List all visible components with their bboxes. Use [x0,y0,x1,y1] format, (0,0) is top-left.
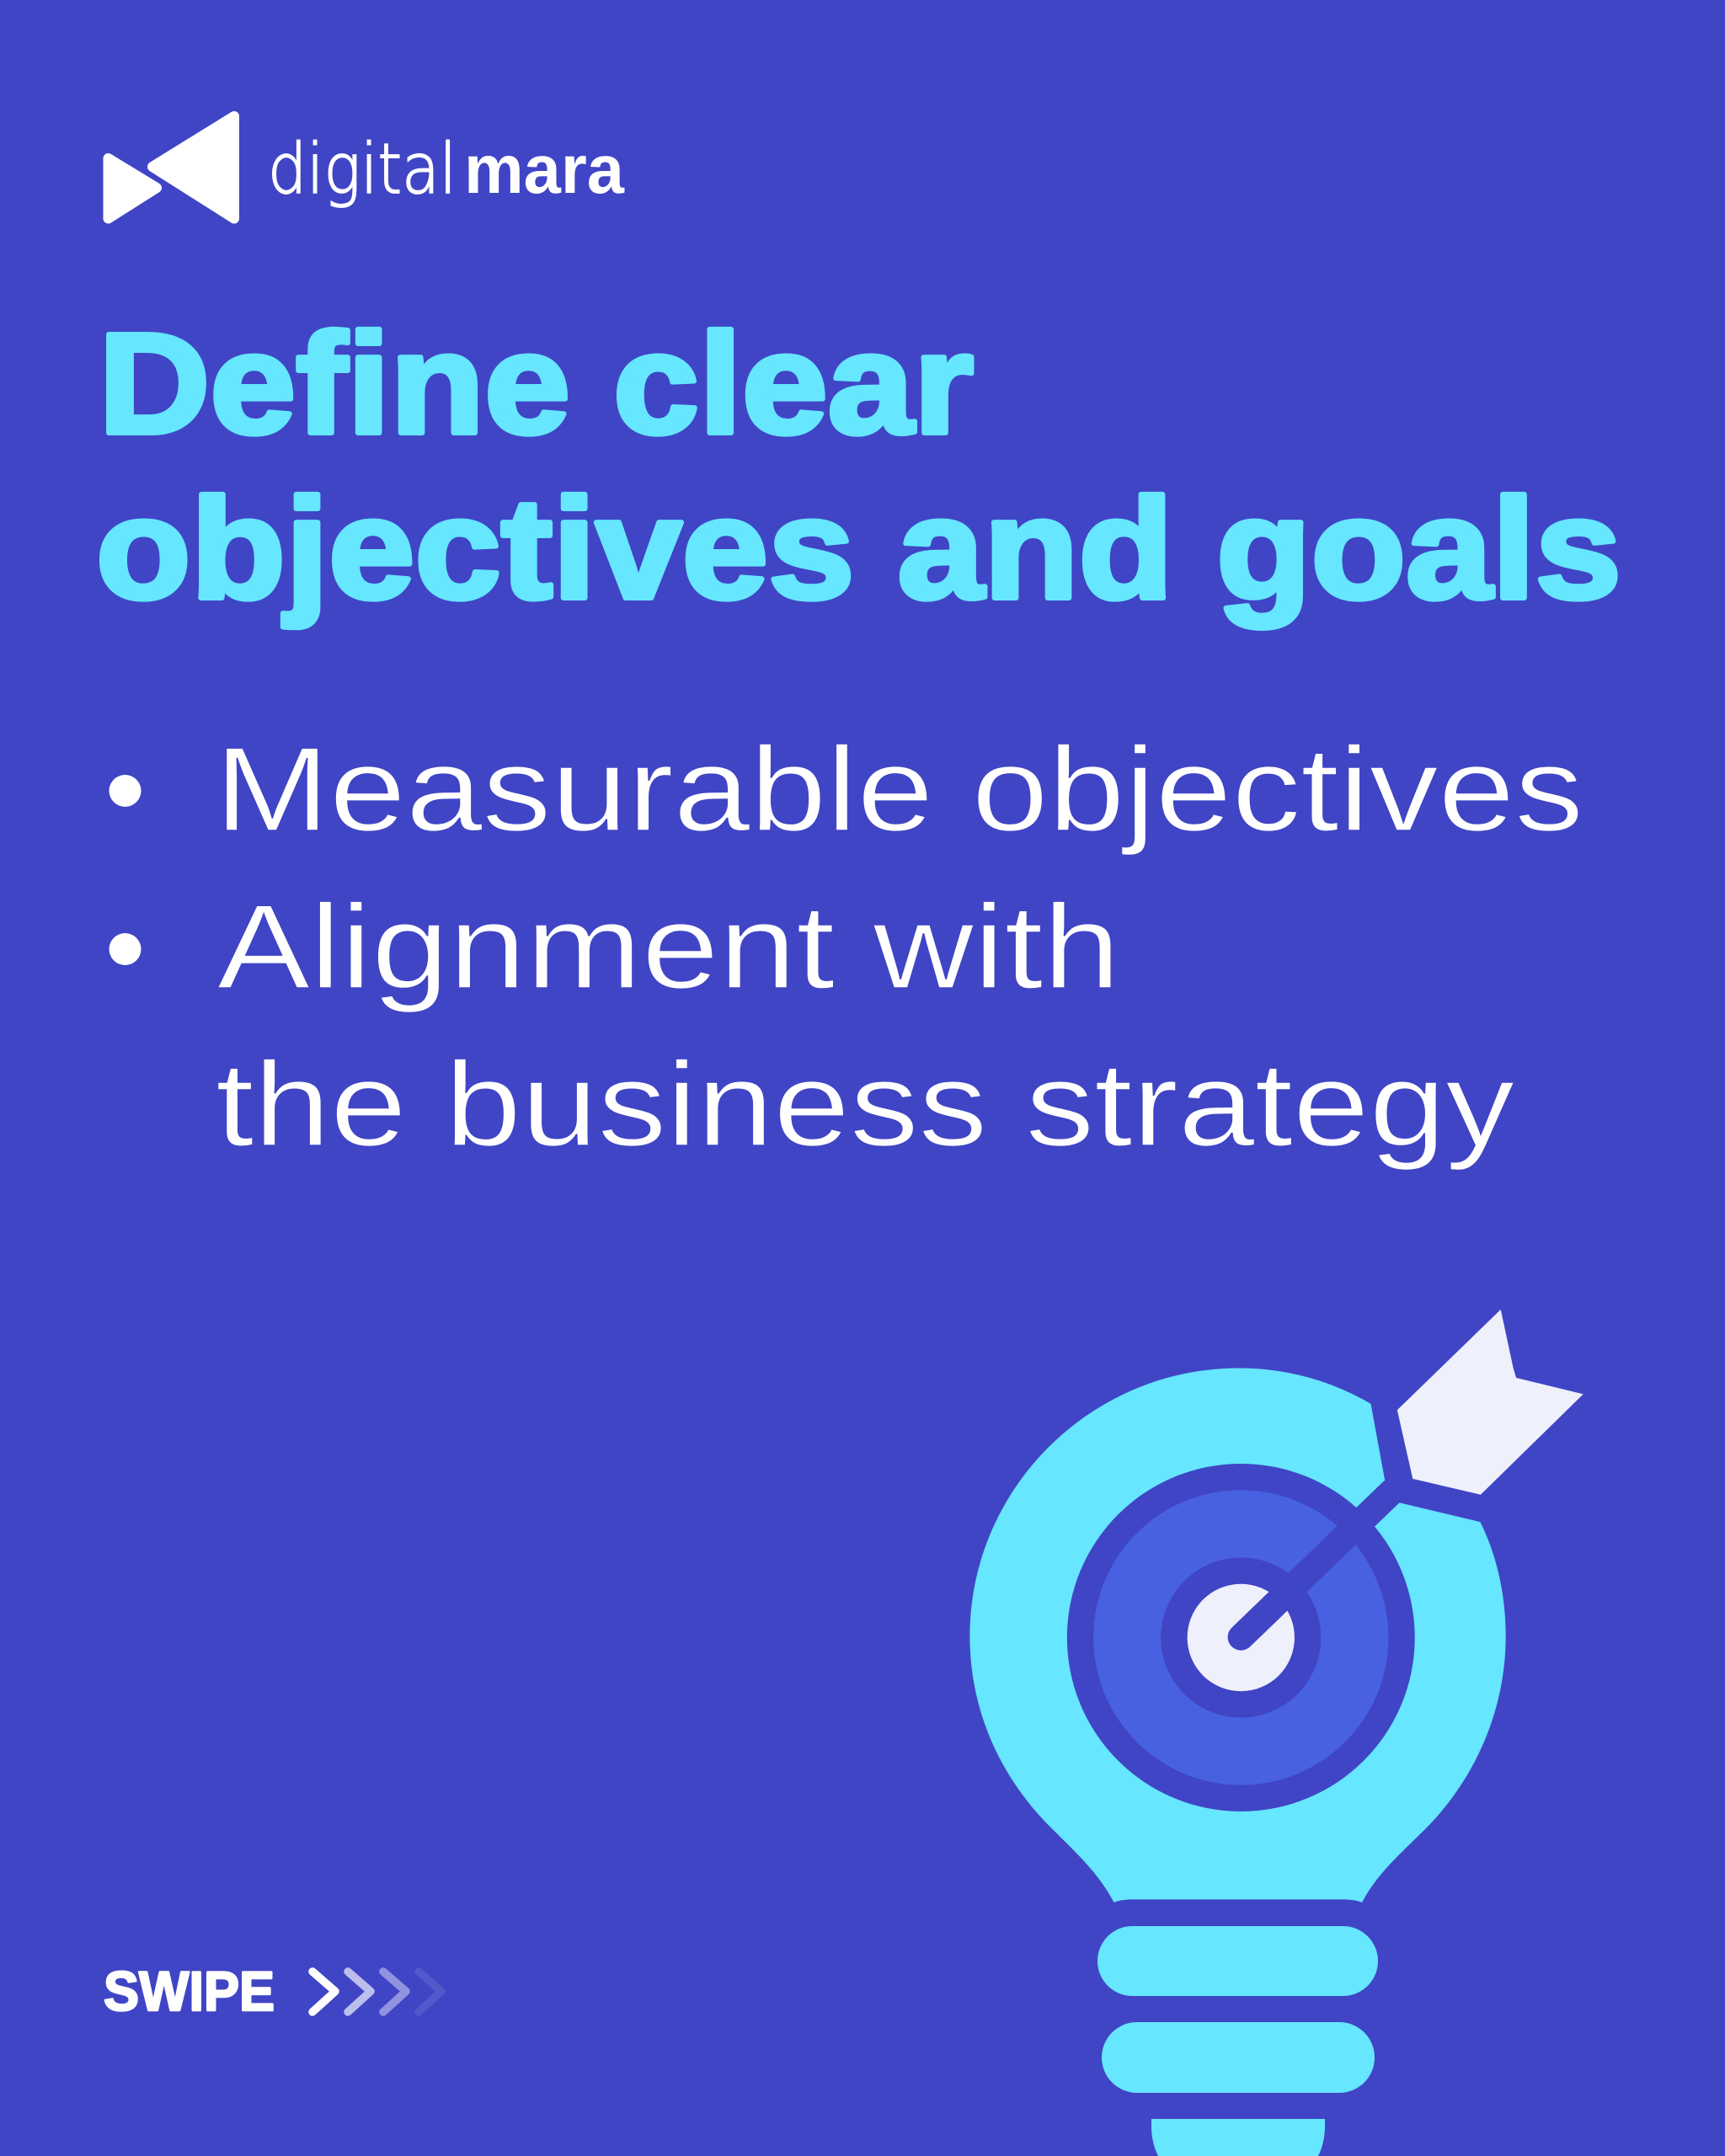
icon: light bulb with target and arrow [969,1310,1583,2156]
swipe label: SWIPE [104,1960,275,2022]
bullet item: alignment with the business strategy: the business strategy [216,1038,1514,1171]
title: Define clear [99,304,974,464]
logo wordmark: digital [268,130,457,210]
bulb glass [969,1310,1583,1903]
bullet item: measurable objectives: Measurable objectives [215,723,1583,857]
target rings [1067,1464,1415,1812]
logo: digitalmara [108,116,625,219]
bullet list [109,723,1583,1171]
arrow shaft [1241,1491,1392,1637]
icon: logo bow-tie triangles [108,116,234,219]
logo wordmark: mara [464,131,625,208]
bullet item: alignment with the business strategy [109,880,1514,1171]
title: objectives and goals [96,469,1621,629]
arrow fletching [1397,1310,1583,1495]
swipe prompt [104,1960,441,2022]
icon: swipe chevrons [312,1972,441,2012]
bullet item: alignment with the business strategy: Alignment with [217,880,1120,1014]
bulb base [1097,1926,1378,2156]
title [96,304,1621,629]
